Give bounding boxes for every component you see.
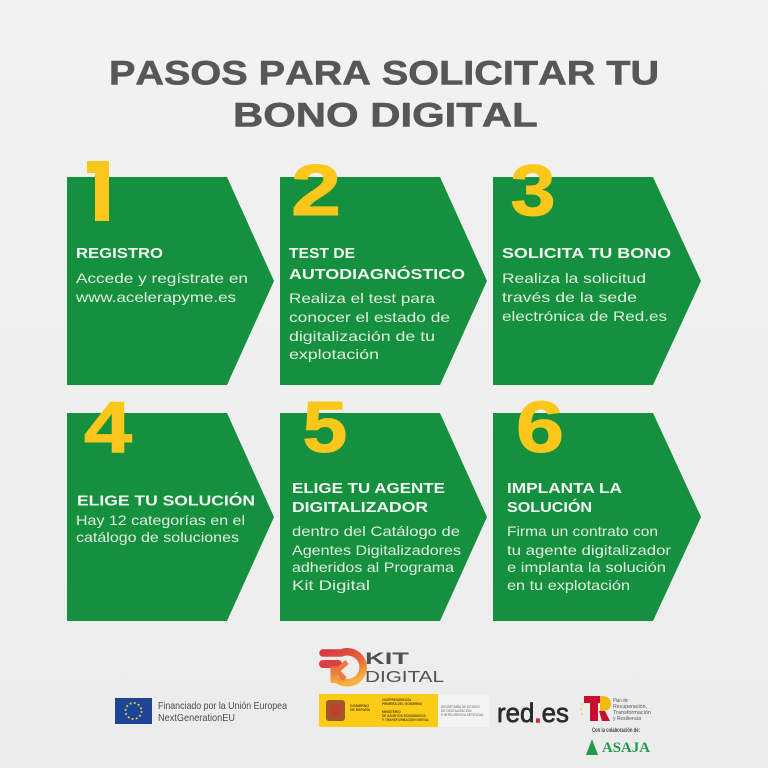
- step text: elige tu solucion: Hay 12 categorías en el: [76, 512, 245, 528]
- step heading: test de autodiagnostico: [289, 245, 465, 283]
- step text: solicita tu bono: través de la sede: [502, 289, 637, 305]
- logo: gobierno de espana: DE ASUNTOS ECONÓMICOS: [382, 713, 426, 718]
- step text: registro: [75, 270, 248, 305]
- logo: plan de recuperacion: y Resiliencia: [613, 716, 642, 722]
- step text: elige tu agente digitalizador: [292, 523, 461, 593]
- step heading: test de autodiagnostico: TEST DE: [289, 245, 355, 262]
- step heading: elige tu agente digitalizador: [292, 480, 445, 516]
- logo: eu flag and funding text: Financiado por la Unión Europea: [158, 700, 287, 712]
- logo: plan de recuperacion: Plan de: [613, 698, 628, 704]
- step text: test de autodiagnostico: [289, 290, 450, 362]
- step text: implanta la solucion: e implanta la solución: [507, 559, 666, 575]
- logo: gobierno de espana: DE DIGITALIZACIÓN: [441, 708, 472, 713]
- logo: gobierno de espana: DE ESPAÑA: [350, 707, 371, 712]
- title: [109, 54, 659, 135]
- step text: solicita tu bono: [502, 270, 667, 324]
- step text: elige tu agente digitalizador: dentro del Catálogo de: [292, 523, 460, 539]
- logo: gobierno de espana: E INTELIGENCIA ARTIFICIAL: [441, 713, 484, 717]
- logo: kit digital: [323, 649, 444, 686]
- panel: step 6: [493, 387, 701, 621]
- step number 5: 5: [302, 388, 347, 468]
- step heading: solicita tu bono: SOLICITA TU BONO: [502, 245, 671, 262]
- step text: test de autodiagnostico: conocer el estado de: [289, 309, 450, 325]
- panel: step 4: [67, 387, 274, 621]
- step text: registro: www.acelerapyme.es: [75, 289, 236, 305]
- logo: plan de recuperacion: [580, 696, 651, 722]
- step text: elige tu solucion: [76, 512, 245, 545]
- logo: gobierno de espana: GOBIERNO: [350, 704, 369, 708]
- panel: step 2: [280, 151, 487, 385]
- logo: gobierno de espana: MINISTERIO: [382, 710, 401, 714]
- logo: gobierno de espana: Y TRANSFORMACIÓN DIGITAL: [382, 717, 429, 722]
- title: PASOS PARA SOLICITAR TU: [109, 54, 659, 92]
- step heading: elige tu agente digitalizador: ELIGE TU AGENTE: [292, 480, 445, 497]
- step text: solicita tu bono: electrónica de Red.es: [502, 308, 667, 324]
- logo: gobierno de espana: [319, 694, 489, 727]
- step text: elige tu agente digitalizador: Kit Digital: [292, 577, 370, 593]
- logo: gobierno de espana: PRIMERA DEL GOBIERNO: [382, 702, 423, 706]
- step text: implanta la solucion: [507, 523, 671, 593]
- step heading: implanta la solucion: [507, 480, 622, 516]
- logo: asaja: ASAJA: [602, 740, 650, 756]
- logo: plan de recuperacion: Recuperación,: [613, 704, 647, 710]
- step heading: implanta la solucion: IMPLANTA LA: [507, 480, 622, 497]
- step text: test de autodiagnostico: Realiza el test para: [289, 290, 435, 306]
- logo: red.es: red.es: [497, 698, 569, 728]
- step heading: registro: REGISTRO: [76, 245, 163, 262]
- icon: coat of arms: [326, 700, 345, 721]
- step text: registro: Accede y regístrate en: [76, 270, 248, 286]
- title: BONO DIGITAL: [233, 96, 538, 135]
- logo: plan de recuperacion: Transformación: [613, 710, 651, 716]
- logo: kit digital: KIT: [365, 649, 410, 668]
- step number 6: 6: [516, 387, 564, 467]
- step heading: implanta la solucion: SOLUCIÓN: [507, 498, 592, 516]
- step number 2: 2: [291, 151, 341, 231]
- collaboration text: Con la colaboración de:: [592, 728, 640, 734]
- step text: elige tu solucion: catálogo de soluciones: [76, 529, 239, 545]
- step text: implanta la solucion: tu agente digitalizador: [507, 542, 671, 558]
- step text: test de autodiagnostico: digitalización de tu: [289, 328, 435, 344]
- step text: elige tu agente digitalizador: adheridos al Programa: [292, 559, 454, 575]
- logo: kit digital: DIGITAL: [365, 669, 444, 686]
- panel: step 5: [280, 388, 487, 621]
- step heading: elige tu agente digitalizador: DIGITALIZADOR: [292, 499, 428, 516]
- step text: implanta la solucion: Firma un contrato con: [507, 523, 658, 539]
- panel: step 3: [493, 151, 701, 385]
- logo: eu flag and funding text: NextGenerationEU: [158, 712, 235, 724]
- step heading: test de autodiagnostico: AUTODIAGNÓSTICO: [289, 265, 465, 283]
- step text: elige tu agente digitalizador: Agentes Digitalizadores: [292, 542, 461, 558]
- panel: step 1: [67, 161, 274, 385]
- step number 1: 1: [97, 184, 107, 204]
- step text: test de autodiagnostico: explotación: [289, 346, 379, 362]
- logo: gobierno de espana: VICEPRESIDENCIA: [382, 698, 412, 702]
- step number 3: 3: [510, 151, 556, 231]
- step heading: elige tu solucion: ELIGE TU SOLUCIÓN: [77, 492, 255, 510]
- step text: solicita tu bono: Realiza la solicitud: [502, 270, 646, 286]
- logo: gobierno de espana: SECRETARÍA DE ESTADO: [441, 705, 481, 709]
- step text: implanta la solucion: en tu explotación: [507, 577, 630, 593]
- step number 1: [87, 161, 109, 221]
- step number 4: 4: [84, 387, 132, 467]
- logo: eu flag and funding text: [115, 698, 287, 724]
